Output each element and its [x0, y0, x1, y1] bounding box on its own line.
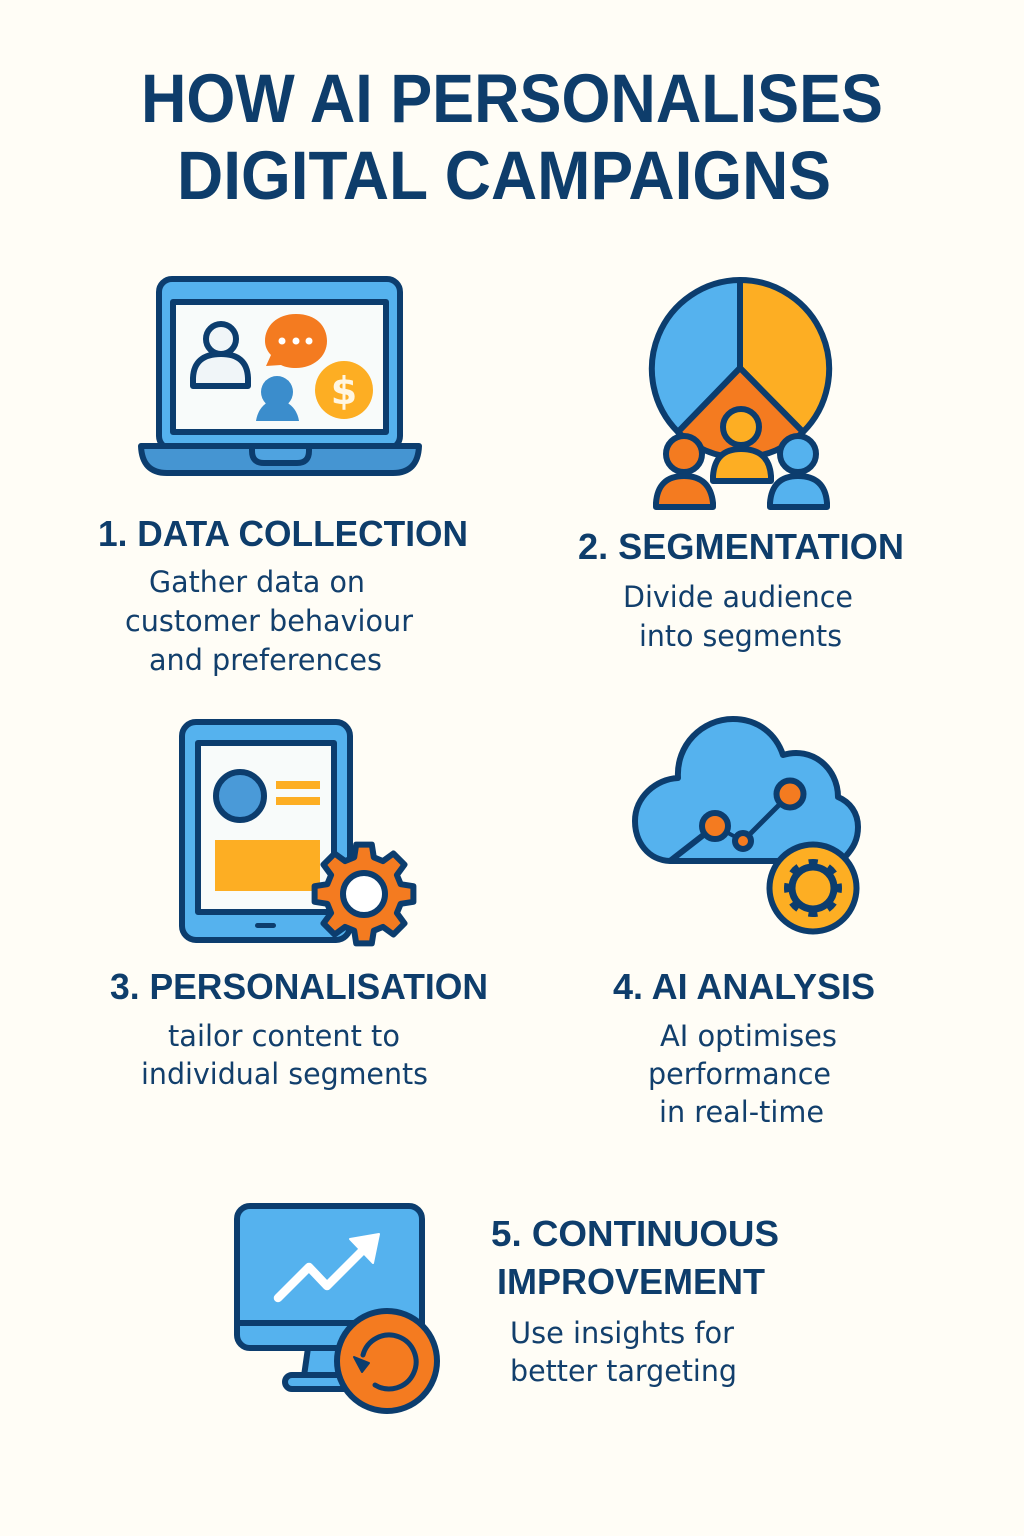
heading: step 2: 2. SEGMENTATION	[578, 526, 904, 567]
text: step 4 description: AI optimises	[660, 1019, 837, 1053]
icon: monitor with refresh	[237, 1206, 437, 1411]
text: step 3 description: tailor content to	[168, 1019, 400, 1053]
icon: cloud analysis	[635, 719, 858, 932]
text: step 1 description	[125, 565, 413, 677]
text: step 2 description: into segments	[639, 619, 842, 653]
text: step 5 description: better targeting	[510, 1354, 737, 1388]
text: step 2 description: Divide audience	[623, 580, 853, 614]
text: step 1 description: customer behaviour	[125, 604, 413, 638]
text: step 3 description: individual segments	[141, 1057, 428, 1091]
title: HOW AI PERSONALISES	[141, 60, 883, 137]
heading: step 1: 1. DATA COLLECTION	[98, 513, 468, 554]
icon: laptop with customer data: $	[331, 369, 357, 413]
heading: step 5	[491, 1213, 779, 1302]
heading: step 5: IMPROVEMENT	[497, 1261, 765, 1302]
text: step 4 description: performance	[648, 1057, 831, 1091]
icon: segmented pie and people	[652, 280, 829, 507]
text: step 1 description: Gather data on	[149, 565, 365, 599]
heading: step 4: 4. AI ANALYSIS	[613, 966, 875, 1007]
heading: step 5: 5. CONTINUOUS	[491, 1213, 779, 1254]
text: step 2 description	[623, 580, 853, 653]
heading: step 3: 3. PERSONALISATION	[110, 966, 488, 1007]
text: step 4 description: in real-time	[659, 1095, 824, 1129]
icon: laptop with customer data	[141, 279, 419, 473]
text: step 3 description	[141, 1019, 428, 1091]
text: step 5 description	[510, 1316, 737, 1388]
text: step 1 description: and preferences	[149, 643, 382, 677]
icon: tablet with gear	[182, 722, 413, 943]
text: step 5 description: Use insights for	[510, 1316, 734, 1350]
title	[141, 60, 883, 214]
text: step 4 description	[648, 1019, 837, 1129]
title: DIGITAL CAMPAIGNS	[177, 137, 831, 214]
